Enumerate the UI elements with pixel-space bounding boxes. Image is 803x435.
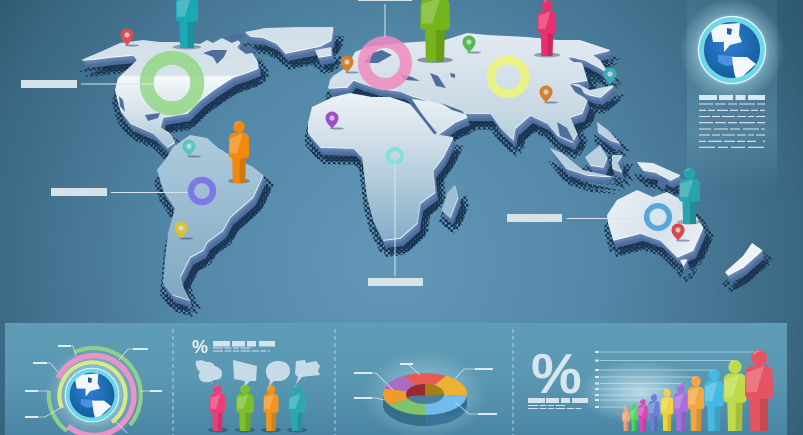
donut segments: [383, 373, 467, 415]
chart grid lines: [600, 352, 755, 407]
ring: Europe: [364, 42, 406, 84]
pin: purple Africa: [326, 112, 344, 130]
pin: orange Asia: [540, 86, 558, 104]
continent: Africa: [308, 93, 467, 240]
people bar chart: [578, 350, 773, 431]
donut walls: [383, 394, 467, 426]
big percent sign: %: [531, 342, 582, 406]
continent: South America: [157, 135, 263, 300]
person: teal Australia: [677, 168, 701, 224]
pin: green Russia: [462, 36, 481, 54]
label bar: North America: [21, 80, 155, 88]
donut chart: [363, 351, 487, 435]
globe with ring arcs: [45, 347, 141, 435]
label bar: Europe: [358, 0, 412, 37]
pin: red Alaska: [120, 28, 139, 46]
bottom panel: [5, 323, 787, 435]
data table: [699, 95, 765, 147]
panel: globe data column: [680, 0, 784, 190]
ring: Asia: [491, 60, 525, 94]
globe labels: [25, 346, 162, 433]
pin: red Australia: [672, 224, 690, 242]
axis labels: [595, 351, 599, 408]
ring arc: pink: [58, 356, 134, 435]
label bar: Africa: [368, 163, 423, 286]
pin: orange Europe: [340, 56, 359, 74]
panel heading: percent small: %: [192, 337, 208, 357]
panel heading: percent small: [192, 337, 275, 357]
ring: Africa: [388, 149, 402, 163]
ring: Australia: [647, 206, 669, 228]
donut hole: [406, 384, 444, 404]
continent: North America: [81, 27, 333, 147]
person: green Europe: [417, 0, 453, 63]
pin: teal Japan: [604, 68, 622, 86]
inland seas and gaps: [119, 33, 668, 190]
icon: top right globe: [680, 0, 784, 102]
speech bubbles: [196, 360, 320, 387]
ring arc: yellow: [59, 362, 125, 422]
donut labels: [354, 364, 497, 414]
continent: Oceania: [607, 162, 762, 275]
pin: teal South America: [182, 140, 201, 158]
label bar: Australia: [507, 214, 642, 222]
label bar: South America: [51, 188, 188, 196]
world map: [78, 27, 773, 317]
person: pink Russia: [534, 0, 560, 58]
person: orange South America: [228, 121, 250, 184]
ring arc: green: [49, 348, 141, 431]
continent: Eurasia: [328, 33, 622, 177]
person: teal North America: [173, 0, 201, 50]
ring: South America: [191, 180, 213, 202]
people row: [208, 385, 307, 432]
ring: North America: [147, 58, 197, 108]
pin: yellow South America: [174, 222, 193, 240]
